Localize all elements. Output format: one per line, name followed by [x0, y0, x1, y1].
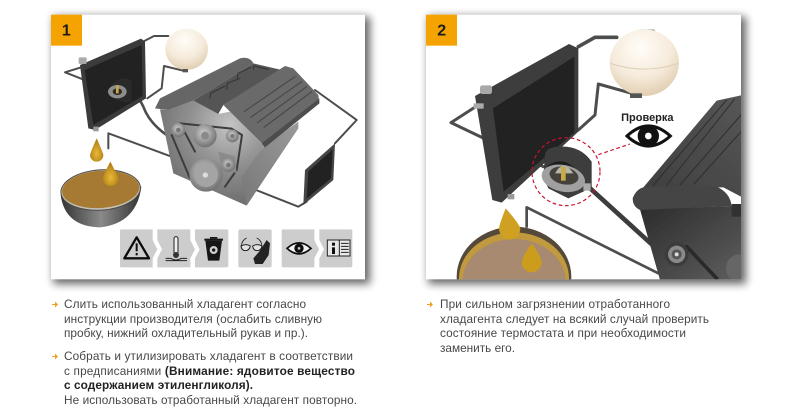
- inspection highlight circle: [532, 138, 630, 206]
- engine: [632, 95, 741, 280]
- drain pan: [456, 226, 572, 280]
- icon tile: warning: [120, 229, 157, 267]
- icon tile: inspect eye: [282, 229, 319, 267]
- engine cover right: [223, 66, 319, 147]
- panel: step 1 illustration: [51, 15, 370, 284]
- icon tile: hot coolant thermometer: [157, 229, 195, 267]
- text block: step 2 bullet: [427, 297, 709, 355]
- text block: step 2 bullet: состояние термостата и при необходимости: [440, 326, 686, 340]
- text block: step 1 second bullet: с предписаниями (Внимание: ядовитое вещество: [64, 364, 355, 378]
- text block: step 1 second bullet: Не использовать отработанный хладагент повторно.: [64, 393, 357, 407]
- cooling pipes: [451, 37, 658, 273]
- pulley: [666, 244, 741, 280]
- step number 1: 1: [62, 22, 71, 39]
- engine body: [640, 205, 741, 280]
- icon: inspection eye: [627, 125, 670, 147]
- radiator: [79, 39, 146, 131]
- radiator: [474, 44, 578, 203]
- pulleys: [171, 123, 239, 192]
- engine: [155, 58, 319, 206]
- cooling pipes: [65, 36, 357, 207]
- text block: step 1 second bullet: Собрать и утилизировать хладагент в соответствии: [64, 349, 353, 363]
- text block: step 1 second bullet: [52, 349, 357, 407]
- thermostat: [539, 147, 592, 198]
- panel: step 2 illustration: [426, 15, 754, 327]
- coolant drops: [499, 208, 542, 272]
- drain pan: [59, 167, 142, 227]
- text block: step 2 bullet: хладагента следует на всякий случай проверить: [440, 312, 709, 326]
- step number 1: [51, 15, 82, 46]
- engine front: [160, 101, 264, 206]
- icon tile: goggles and gloves: [238, 229, 272, 267]
- thermostat: [108, 85, 127, 98]
- engine cover left: [155, 58, 253, 110]
- inspection label: Проверка: [621, 112, 674, 124]
- text block: step 1 first bullet: [52, 297, 322, 340]
- step number 2: 2: [437, 22, 446, 39]
- text block: step 1 first bullet: пробку, нижний охладительный рукав и пр.).: [64, 326, 308, 340]
- engine side: [240, 122, 298, 206]
- icon tile: recycle bin: [195, 229, 228, 267]
- step number 2: [426, 15, 457, 46]
- text block: step 2 bullet: При сильном загрязнении отработанного: [440, 297, 670, 311]
- text block: step 1 second bullet: с содержанием этиленгликоля).: [64, 378, 253, 392]
- engine cover middle: [193, 63, 282, 114]
- text block: step 2 bullet: заменить его.: [440, 341, 515, 355]
- safety icons row: [120, 229, 352, 267]
- engine cover front: [633, 187, 732, 210]
- text block: step 1 first bullet: Слить использованный хладагент согласно: [64, 297, 306, 311]
- expansion bottle: [165, 29, 208, 72]
- engine cover top: [643, 95, 741, 197]
- text block: step 1 first bullet: инструкции производителя (ослабить сливную: [64, 312, 322, 326]
- small radiator: [303, 143, 335, 205]
- icon tile: manual book: [319, 229, 352, 267]
- expansion bottle: [610, 29, 679, 98]
- belt: [172, 123, 242, 187]
- coolant drops: [90, 138, 119, 186]
